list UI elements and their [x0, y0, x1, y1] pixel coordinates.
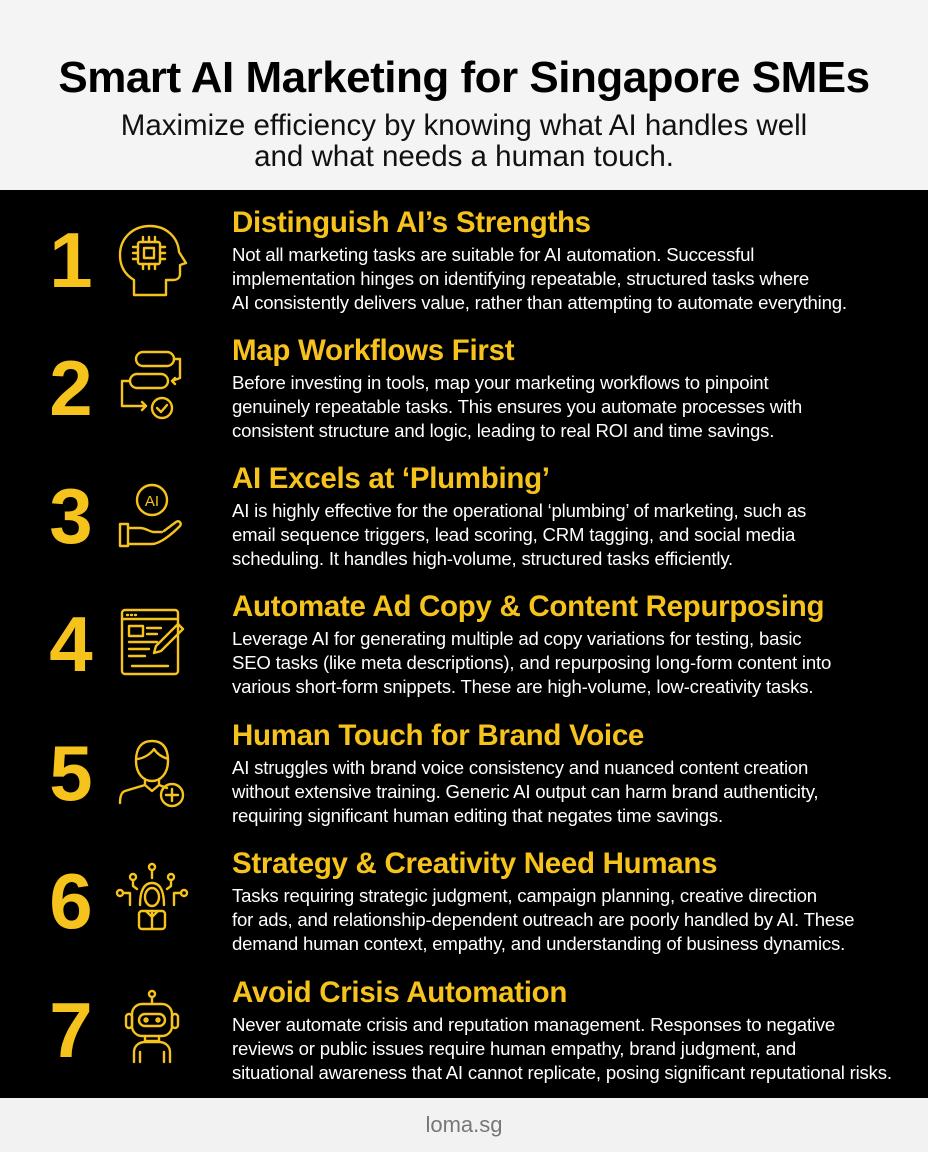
text [232, 757, 818, 826]
number 5: 5 [49, 729, 93, 817]
text [232, 372, 802, 441]
text: Not all marketing tasks are suitable for AI automation. Successful [232, 244, 754, 265]
footer [0, 1098, 928, 1152]
text: situational awareness that AI cannot replicate, posing significant reputational risks. [232, 1062, 892, 1083]
text: requiring significant human editing that negates time savings. [232, 805, 723, 826]
text: Leverage AI for generating multiple ad copy variations for testing, basic [232, 628, 801, 649]
icon: person with plus [118, 740, 184, 808]
number 6: 6 [49, 857, 93, 945]
icon: document with pencil [120, 608, 184, 676]
text: Never automate crisis and reputation management. Responses to negative [232, 1014, 835, 1035]
subtitle: and what needs a human touch. [254, 140, 674, 173]
row 1 [49, 206, 847, 313]
icon: robot [124, 990, 180, 1064]
text [232, 628, 831, 697]
icon: person with network [116, 862, 188, 930]
text: Before investing in tools, map your marketing workflows to pinpoint [232, 372, 768, 393]
number 4: 4 [49, 600, 93, 688]
text: consistent structure and logic, leading to real ROI and time savings. [232, 420, 774, 441]
text: Tasks requiring strategic judgment, campaign planning, creative direction [232, 885, 817, 906]
icon: hand with AI [118, 484, 182, 548]
text [232, 500, 806, 569]
text: without extensive training. Generic AI output can harm brand authenticity, [232, 781, 818, 802]
icon: hand with AI: AI [145, 493, 159, 510]
footer: loma.sg [425, 1112, 503, 1137]
row 2 [49, 334, 802, 441]
heading: Automate Ad Copy & Content Repurposing [232, 590, 824, 623]
heading: AI Excels at ‘Plumbing’ [232, 462, 550, 495]
text: for ads, and relationship-dependent outreach are poorly handled by AI. These [232, 909, 854, 930]
subtitle [121, 109, 807, 173]
row 6 [49, 847, 854, 954]
text: reviews or public issues require human empathy, brand judgment, and [232, 1038, 796, 1059]
icon: workflow [120, 350, 182, 420]
heading: Map Workflows First [232, 334, 514, 367]
text: SEO tasks (like meta descriptions), and repurposing long-form content into [232, 652, 831, 673]
title: Smart AI Marketing for Singapore SMEs [58, 53, 870, 102]
row 5 [49, 719, 818, 826]
number 1: 1 [49, 216, 93, 304]
number 3: 3 [49, 472, 93, 560]
header [0, 0, 928, 190]
text [232, 885, 854, 954]
row 7 [49, 976, 892, 1083]
text: AI consistently delivers value, rather than attempting to automate everything. [232, 292, 847, 313]
number 2: 2 [49, 344, 93, 432]
text: scheduling. It handles high-volume, structured tasks efficiently. [232, 548, 733, 569]
text [232, 1014, 892, 1083]
heading: Avoid Crisis Automation [232, 976, 567, 1009]
text: demand human context, empathy, and understanding of business dynamics. [232, 933, 845, 954]
number 7: 7 [49, 986, 93, 1074]
heading: Distinguish AI’s Strengths [232, 206, 591, 239]
text: AI struggles with brand voice consistency and nuanced content creation [232, 757, 808, 778]
icon: head with chip [118, 224, 188, 296]
text: various short-form snippets. These are high-volume, low-creativity tasks. [232, 676, 813, 697]
text: genuinely repeatable tasks. This ensures you automate processes with [232, 396, 802, 417]
text: implementation hinges on identifying repeatable, structured tasks where [232, 268, 809, 289]
heading: Human Touch for Brand Voice [232, 719, 644, 752]
subtitle: Maximize efficiency by knowing what AI handles well [121, 109, 807, 142]
heading: Strategy & Creativity Need Humans [232, 847, 717, 880]
text [232, 244, 847, 313]
row 4 [49, 590, 831, 697]
text: AI is highly effective for the operational ‘plumbing’ of marketing, such as [232, 500, 806, 521]
row 3 [49, 462, 806, 569]
text: email sequence triggers, lead scoring, CRM tagging, and social media [232, 524, 795, 545]
